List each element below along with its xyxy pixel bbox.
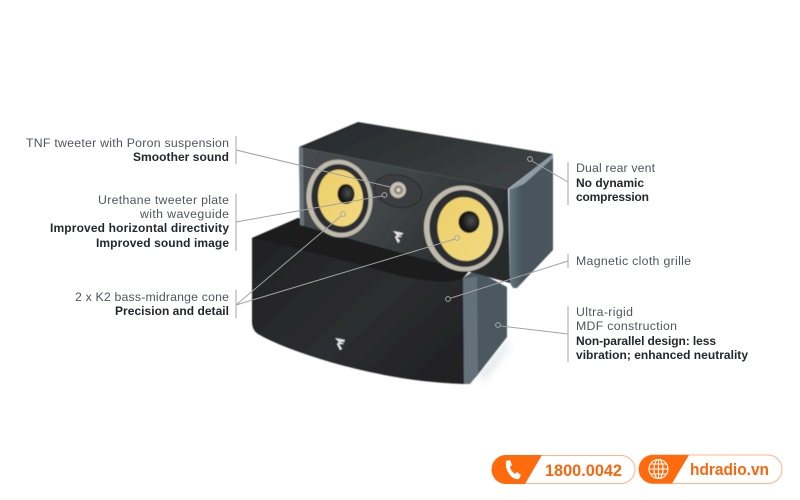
- callout: K2 cone: [75, 290, 236, 318]
- callout: K2 cone: 2 x K2 bass-midrange cone: [75, 290, 229, 304]
- icon: right woofer: [418, 180, 509, 277]
- callout: dual rear vent: [568, 161, 656, 205]
- callout: MDF construction: Ultra-rigid: [576, 305, 633, 319]
- icon: lower logo: [335, 338, 345, 350]
- callout: MDF construction: Non-parallel design: less: [576, 334, 716, 348]
- upper speaker: front baffle: [299, 147, 510, 283]
- callout: TNF tweeter: TNF tweeter with Poron suspension: [26, 136, 229, 150]
- callout: MDF construction: MDF construction: [576, 319, 677, 333]
- leader: cloth grille: [446, 261, 568, 301]
- lower speaker: front grille: [252, 218, 470, 384]
- callout: TNF tweeter: Smoother sound: [133, 150, 229, 164]
- badge: website: hdradio.vn: [690, 460, 769, 479]
- badge: phone number: 1800.0042: [545, 461, 622, 480]
- icon: upper logo: [393, 231, 403, 243]
- callout: MDF construction: [568, 305, 748, 362]
- callout: TNF tweeter: [26, 136, 236, 164]
- icon: left woofer: [301, 155, 378, 242]
- lower speaker: side highlight: [463, 277, 478, 384]
- callout: K2 cone: Precision and detail: [115, 304, 229, 318]
- callout: dual rear vent: Dual rear vent: [576, 161, 656, 175]
- leader: MDF construction: [496, 323, 568, 334]
- icon: tweeter plate and dome: [371, 170, 425, 212]
- lower speaker: side panel: [463, 270, 507, 384]
- callout: urethane tweeter plate: Improved sound image: [96, 236, 229, 250]
- callout: urethane tweeter plate: [50, 193, 236, 251]
- icon: globe: [649, 460, 668, 478]
- leader: rear vent: [528, 157, 568, 182]
- leader: K2 left and right cones: [236, 212, 459, 305]
- lower speaker shadow: [478, 340, 510, 382]
- upper speaker: left edge: [299, 147, 304, 226]
- leader: urethane plate: [236, 193, 387, 222]
- upper speaker: side panel: [509, 154, 553, 288]
- badge: phone number: [492, 455, 635, 484]
- callout: MDF construction: vibration; enhanced neutrality: [576, 348, 748, 362]
- callout: urethane tweeter plate: Urethane tweeter plate: [98, 193, 229, 207]
- panel: speaker illustration: [252, 122, 553, 384]
- callout: urethane tweeter plate: with waveguide: [139, 207, 229, 221]
- callout: dual rear vent: No dynamic: [576, 176, 644, 190]
- callout: magnetic cloth grille: Magnetic cloth grille: [576, 254, 691, 268]
- upper speaker: top face: [299, 122, 553, 189]
- upper speaker: bevel highlight: [509, 154, 553, 189]
- lower speaker: grille top lip: [252, 218, 470, 282]
- badge: website: [639, 455, 782, 484]
- callout: dual rear vent: compression: [576, 190, 649, 204]
- callout: urethane tweeter plate: Improved horizontal directivity: [50, 221, 229, 235]
- icon: phone: [506, 460, 521, 479]
- leader: TNF tweeter: [236, 150, 390, 187]
